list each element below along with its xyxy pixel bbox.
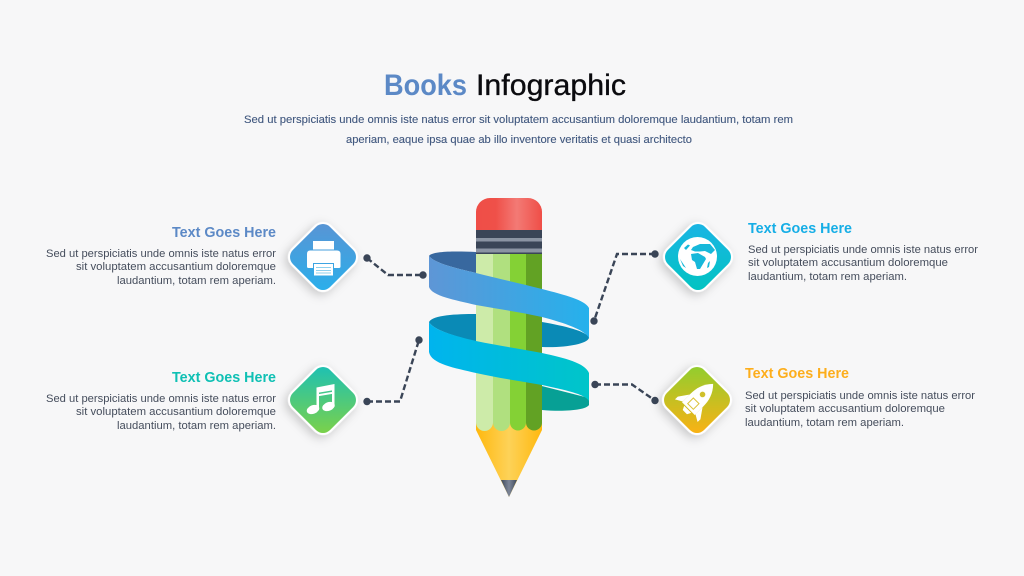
pencil ferrule [476, 230, 542, 254]
subtitle text: aperiam, eaque ipsa quae ab illo inventore veritatis et quasi architecto [346, 134, 692, 146]
icon: globe diamond [658, 217, 738, 297]
text block: bottom right [745, 366, 975, 429]
pencil body [476, 254, 542, 431]
text block: top right: sit voluptatem accusantium doloremque [748, 257, 948, 269]
connector: printer [363, 254, 427, 279]
connector: music [363, 336, 423, 405]
text block: bottom right: laudantium, totam rem aperiam. [745, 417, 904, 429]
ribbon: upper back [429, 251, 490, 280]
text block: bottom right: Text Goes Here [745, 366, 849, 382]
text block: bottom left: sit voluptatem accusantium doloremque [76, 406, 276, 418]
subtitle text [244, 114, 793, 146]
text block: top left: Sed ut perspiciatis unde omnis iste natus error [46, 248, 276, 260]
music notes glyph [305, 384, 336, 416]
icon: printer diamond [283, 217, 363, 297]
text block: bottom left: Text Goes Here [172, 370, 276, 386]
globe glyph [678, 237, 717, 276]
text block: top right [748, 221, 978, 283]
title: Books [384, 69, 467, 102]
connector: globe [590, 250, 659, 325]
printer glyph [307, 241, 340, 276]
icon: rocket diamond [657, 360, 737, 440]
text block: top right: laudantium, totam rem aperiam. [748, 271, 907, 283]
subtitle text: Sed ut perspiciatis unde omnis iste natus error sit voluptatem accusantium doloremque laudantium, totam rem [244, 114, 793, 126]
ribbon: lower back [530, 383, 589, 411]
text block: bottom left: Sed ut perspiciatis unde omnis iste natus error [46, 393, 276, 405]
text block: top left: sit voluptatem accusantium doloremque [76, 261, 276, 273]
text block: bottom right: Sed ut perspiciatis unde omnis iste natus error [745, 390, 975, 402]
ribbon: lower front band [429, 322, 589, 401]
title: Infographic [476, 69, 626, 102]
ribbon: middle back [429, 314, 589, 347]
pencil eraser [476, 198, 542, 230]
pencil tip [476, 415, 542, 497]
text block: top right: Sed ut perspiciatis unde omnis iste natus error [748, 244, 978, 256]
text block: bottom left [46, 370, 276, 432]
connector: rocket [591, 381, 659, 404]
rocket glyph [674, 373, 724, 423]
ribbon: upper front band [429, 256, 589, 338]
icon: music diamond [283, 360, 363, 440]
text block: top right: Text Goes Here [748, 221, 852, 237]
text block: top left [46, 225, 276, 287]
text block: bottom right: sit voluptatem accusantium doloremque [745, 403, 945, 415]
pencil with ribbon [429, 198, 589, 497]
text block: top left: laudantium, totam rem aperiam. [117, 275, 276, 287]
title [384, 69, 626, 102]
text block: bottom left: laudantium, totam rem aperiam. [117, 420, 276, 432]
text block: top left: Text Goes Here [172, 225, 276, 241]
